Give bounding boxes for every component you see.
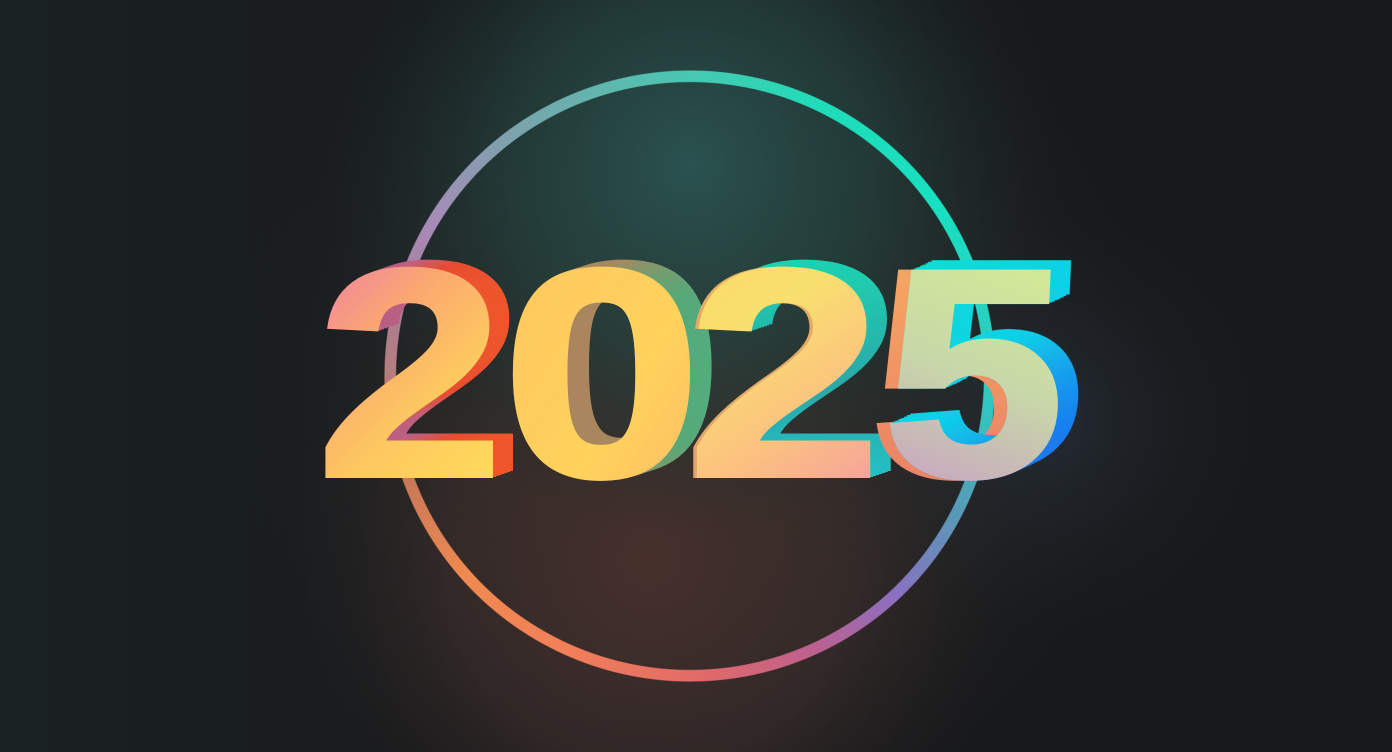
gradient ring bbox=[384, 70, 996, 682]
digit 2 (second): 2 bbox=[687, 207, 882, 539]
ring glow bbox=[384, 70, 996, 682]
digit 2 (first): 2 bbox=[316, 208, 504, 539]
digit 2 (first): 2 bbox=[316, 208, 504, 539]
digit 5: 5 bbox=[864, 208, 1060, 540]
digit 2 (second): 2 bbox=[687, 207, 882, 539]
digit 0: 0 bbox=[501, 208, 703, 540]
digit 0: 0 bbox=[501, 208, 703, 540]
digit 5: 5 bbox=[877, 208, 1073, 540]
digit 5: 5 bbox=[877, 208, 1073, 540]
digit 2 (second): 2 bbox=[683, 207, 878, 539]
